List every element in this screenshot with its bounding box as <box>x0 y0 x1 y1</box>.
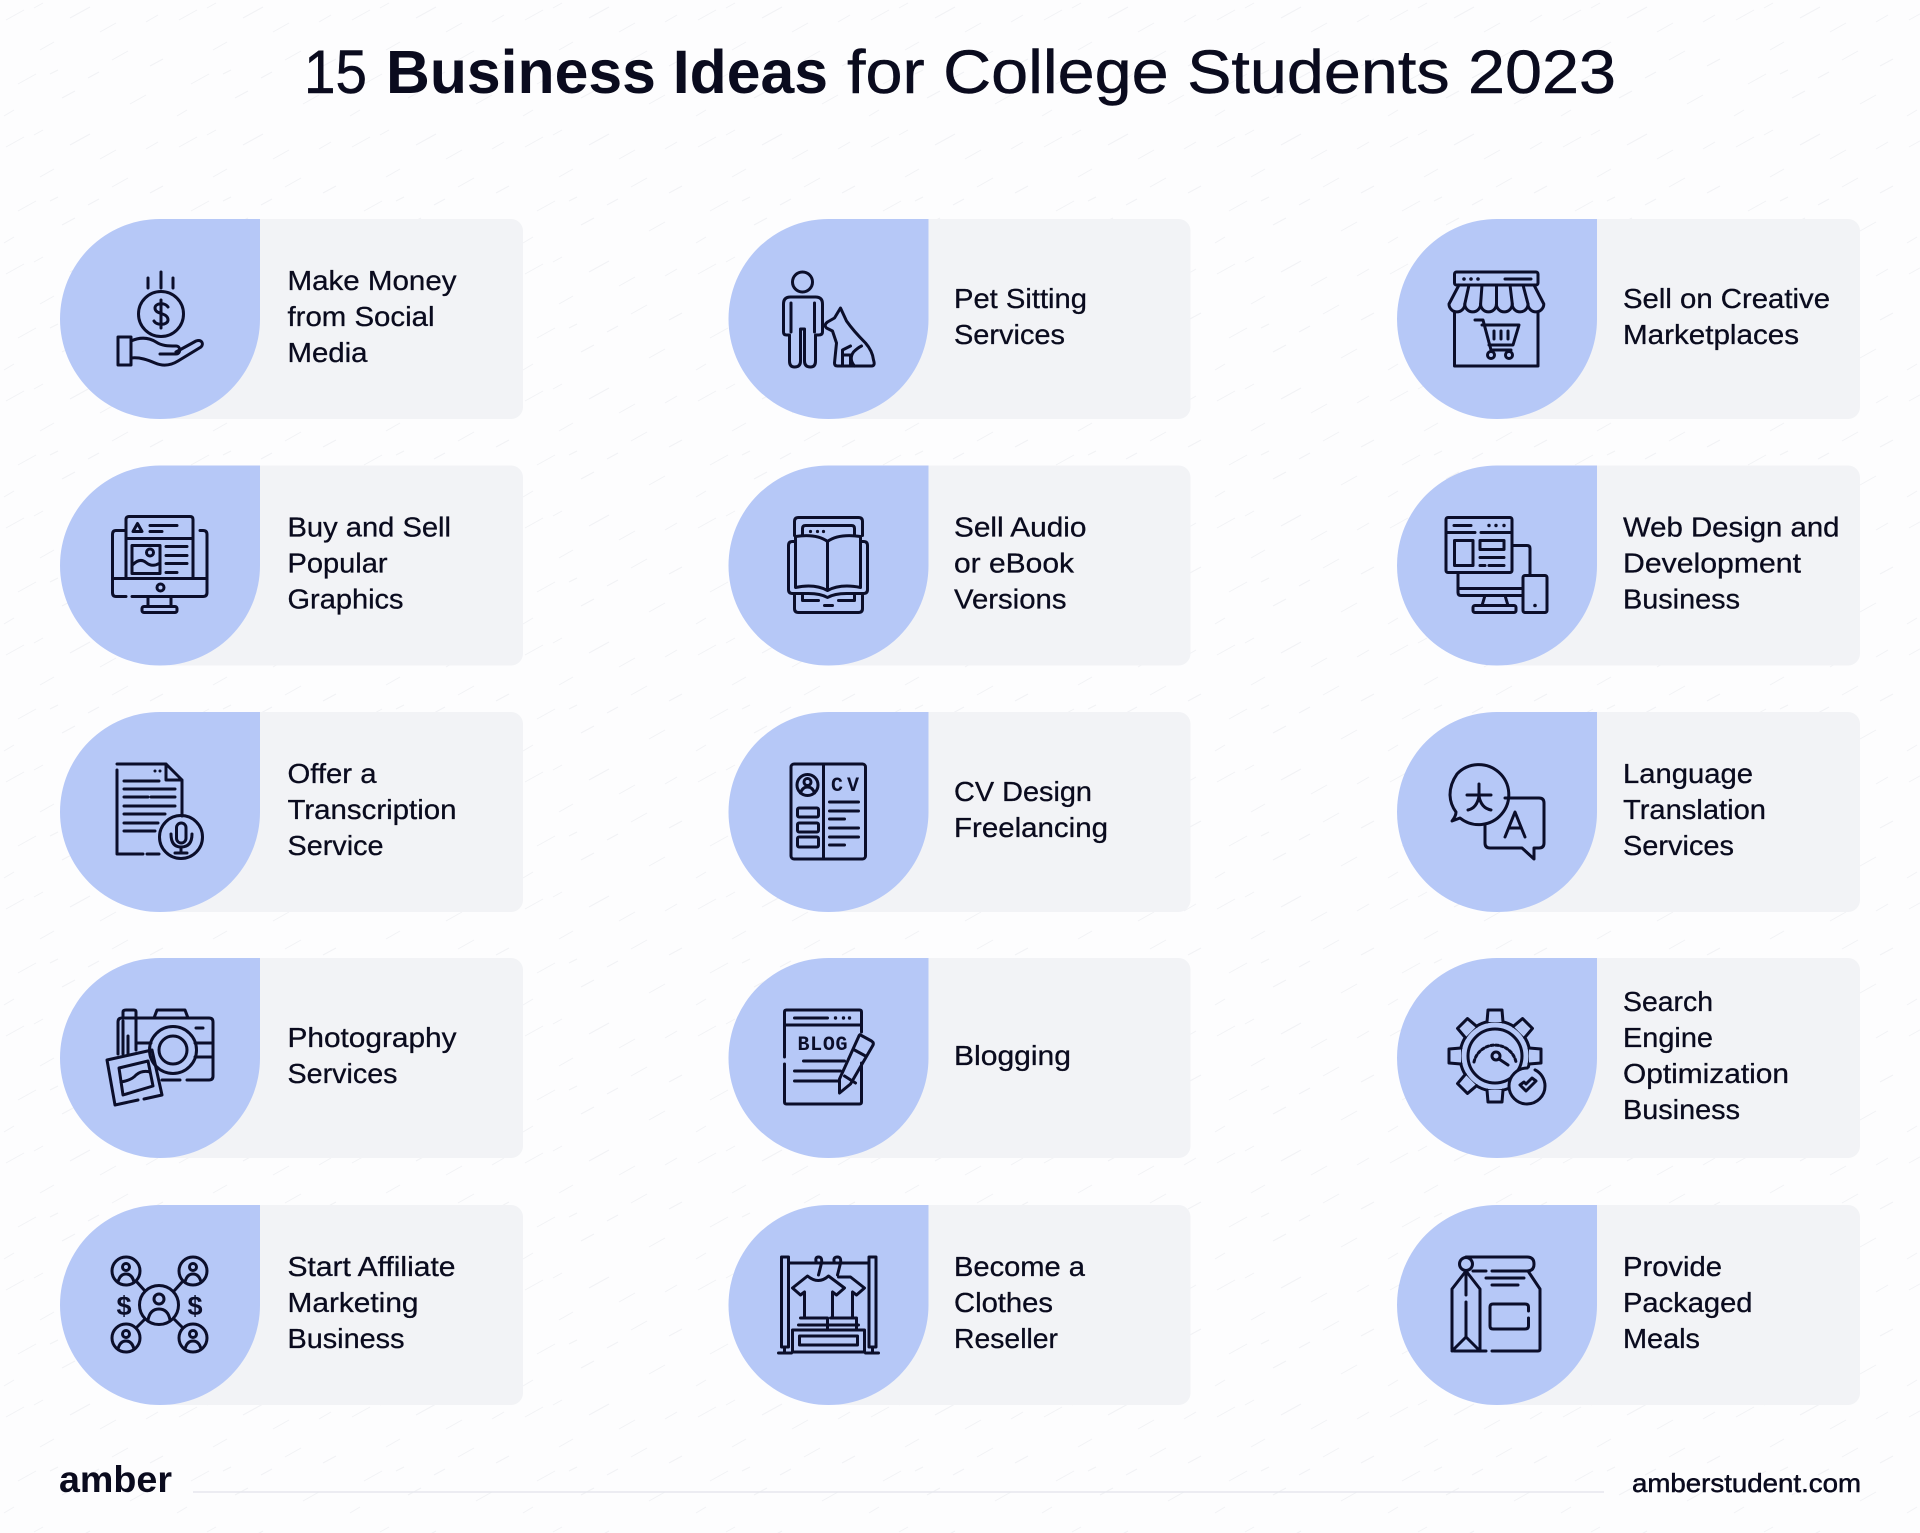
label: Clothes <box>954 1287 1053 1318</box>
icon: blog page and pencil: BLOG <box>798 1034 848 1057</box>
card: Buy and Sell Popular Graphics <box>60 466 523 666</box>
label: Services <box>954 319 1065 350</box>
blue drop <box>728 219 928 419</box>
label: Business <box>1623 1094 1740 1125</box>
label <box>954 776 1108 843</box>
card background <box>828 219 1190 419</box>
label <box>954 512 1086 614</box>
card background <box>1497 466 1860 666</box>
icon: clothes rack <box>778 1257 878 1353</box>
label: Make Money <box>288 265 456 296</box>
icon: packaged meal bag <box>1452 1257 1540 1351</box>
label: Sell Audio <box>954 512 1086 542</box>
card: Provide Packaged Meals <box>1397 1205 1860 1405</box>
blue drop <box>1397 712 1597 912</box>
label: Popular <box>288 548 388 578</box>
footer logo: amber: amber <box>59 1459 172 1500</box>
icon: affiliate network: $ <box>187 1291 203 1321</box>
label <box>288 758 456 861</box>
label: or eBook <box>954 548 1075 578</box>
blue drop <box>60 1205 260 1405</box>
icon: monitor with graphics <box>112 516 207 612</box>
label: Business <box>1623 584 1740 614</box>
card: Sell Audio or eBook Versions <box>728 466 1190 666</box>
card: Photography Services <box>60 958 523 1158</box>
icon: person and dog <box>784 272 874 367</box>
card: Web Design and Development Business <box>1397 466 1860 666</box>
blue drop <box>728 712 928 912</box>
blue drop <box>728 958 928 1158</box>
label: Business <box>288 1323 404 1354</box>
label <box>1623 1251 1752 1354</box>
label: Packaged <box>1623 1287 1752 1318</box>
card background <box>828 958 1190 1158</box>
label: Optimization <box>1623 1058 1789 1089</box>
label: Development <box>1623 548 1801 578</box>
blue drop <box>60 712 260 912</box>
card background <box>1497 219 1860 419</box>
title <box>304 38 1616 106</box>
label <box>288 265 456 368</box>
card: Pet Sitting Services <box>728 219 1190 419</box>
label: Blogging <box>954 1040 1071 1071</box>
card: CV Design Freelancing <box>728 712 1190 912</box>
label: Translation <box>1623 794 1766 825</box>
icon: CV document <box>791 764 866 859</box>
footer url: amberstudent.com <box>1632 1468 1861 1498</box>
card background <box>828 712 1190 912</box>
label: Freelancing <box>954 812 1108 843</box>
card background <box>160 466 523 666</box>
icon: storefront with cart <box>1449 272 1544 366</box>
card: Language Translation Services <box>1397 712 1860 912</box>
label: Language <box>1623 758 1753 789</box>
label: Marketing <box>288 1287 418 1318</box>
card background <box>160 219 523 419</box>
label <box>1623 758 1766 861</box>
icon: CV document: CV <box>831 775 859 798</box>
label: Pet Sitting <box>954 283 1087 314</box>
card: Make Money from Social Media <box>60 219 523 419</box>
label: Media <box>288 337 368 368</box>
blue drop <box>60 219 260 419</box>
label: Graphics <box>288 584 404 614</box>
icon: affiliate network <box>112 1257 207 1352</box>
icon: translation speech bubbles <box>1450 765 1544 859</box>
card background <box>828 1205 1190 1405</box>
icon: tablet with open book <box>788 518 868 612</box>
label: Start Affiliate <box>288 1251 456 1282</box>
icon: affiliate network: $ <box>116 1291 132 1321</box>
label <box>288 1251 456 1354</box>
card background <box>1497 1205 1860 1405</box>
label: Search <box>1623 986 1713 1017</box>
card: Start Affiliate Marketing Business <box>60 1205 523 1405</box>
blue drop <box>1397 1205 1597 1405</box>
blue drop <box>60 958 260 1158</box>
blue drop <box>728 466 928 666</box>
title: 15 <box>304 38 367 106</box>
label <box>1623 512 1840 614</box>
label: Marketplaces <box>1623 319 1799 350</box>
card: Search Engine Optimization Business <box>1397 958 1860 1158</box>
blue drop <box>1397 219 1597 419</box>
card: Offer a Transcription Service <box>60 712 523 912</box>
label: Photography <box>288 1022 456 1053</box>
label <box>954 283 1087 350</box>
icon: blog page and pencil <box>784 1010 873 1104</box>
card background <box>160 712 523 912</box>
label: Meals <box>1623 1323 1700 1354</box>
blue drop <box>728 1205 928 1405</box>
label: from Social <box>288 301 434 332</box>
icon: gear gauge with check <box>1449 1010 1545 1104</box>
label: Web Design and <box>1623 512 1840 542</box>
icon: hand holding coin <box>118 272 202 365</box>
card background <box>1497 712 1860 912</box>
card: Sell on Creative Marketplaces <box>1397 219 1860 419</box>
label: Provide <box>1623 1251 1722 1282</box>
label: Sell on Creative <box>1623 283 1830 314</box>
label <box>288 1022 456 1089</box>
label: Versions <box>954 584 1066 614</box>
label: Services <box>1623 830 1734 861</box>
label: Offer a <box>288 758 377 789</box>
title: Business Ideas <box>386 38 828 106</box>
card background <box>160 1205 523 1405</box>
icon: browser, monitor and phone <box>1446 518 1547 612</box>
label: Engine <box>1623 1022 1713 1053</box>
title: for College Students 2023 <box>847 38 1616 106</box>
blue drop <box>60 466 260 666</box>
label: Reseller <box>954 1323 1058 1354</box>
icon: document with microphone <box>117 764 202 858</box>
blue drop <box>1397 958 1597 1158</box>
label: Buy and Sell <box>288 512 451 542</box>
icon: camera and photo <box>107 1010 213 1105</box>
label <box>954 1251 1085 1354</box>
label <box>1623 283 1830 350</box>
label: CV Design <box>954 776 1092 807</box>
label: Service <box>288 830 384 861</box>
blue drop <box>1397 466 1597 666</box>
card background <box>160 958 523 1158</box>
label: Transcription <box>288 794 456 825</box>
label: Become a <box>954 1251 1085 1282</box>
card: Become a Clothes Reseller <box>728 1205 1190 1405</box>
card background <box>828 466 1190 666</box>
card background <box>1497 958 1860 1158</box>
label <box>1623 986 1789 1125</box>
card: Blogging <box>728 958 1190 1158</box>
label <box>288 512 451 614</box>
label: Services <box>288 1058 398 1089</box>
